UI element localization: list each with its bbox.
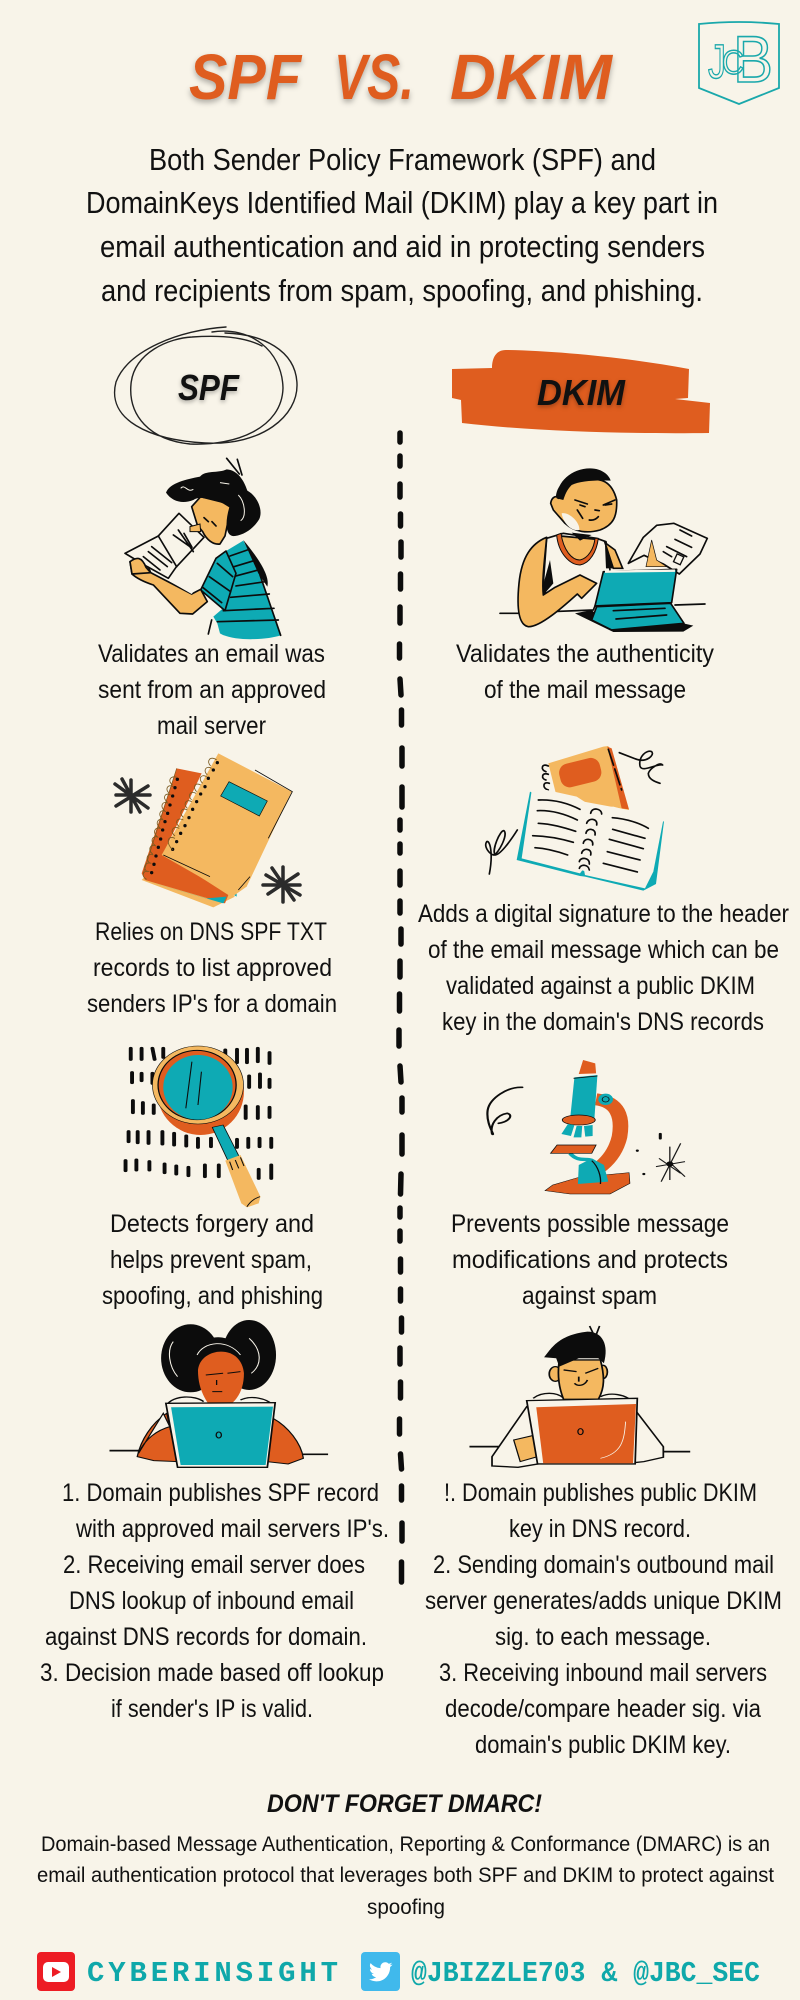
- text: SPF DNS records: records to list approved: [93, 954, 332, 982]
- text: DKIM prevents modification: Prevents possible message: [451, 1210, 729, 1238]
- title: SPF: [189, 41, 303, 113]
- DMARC paragraph: spoofing: [367, 1895, 445, 1919]
- DKIM heading on orange brush stroke: [452, 350, 710, 433]
- text: DKIM digital signature: key in the domain's DNS records: [442, 1008, 764, 1036]
- intro paragraph: and recipients from spam, spoofing, and phishing.: [101, 273, 703, 308]
- text: SPF detects forgery: spoofing, and phishing: [102, 1282, 323, 1310]
- SPF heading with hand-drawn circle: [115, 327, 297, 444]
- text: DKIM prevents modification: modifications and protects: [452, 1246, 728, 1274]
- text: DKIM process steps: sig. to each message.: [495, 1623, 711, 1651]
- text: SPF validates: mail server: [157, 712, 266, 740]
- text: SPF process steps: with approved mail servers IP's.: [75, 1515, 389, 1543]
- text: SPF DNS records: [87, 918, 337, 1018]
- intro paragraph: email authentication and aid in protecting senders: [100, 229, 705, 264]
- text: DKIM process steps: decode/compare header sig. via: [445, 1695, 761, 1723]
- text: SPF process steps: 1. Domain publishes SPF record: [62, 1479, 379, 1507]
- text: SPF validates: Validates an email was: [98, 640, 325, 668]
- text: SPF detects forgery: Detects forgery and: [110, 1210, 314, 1238]
- text: SPF validates: sent from an approved: [98, 676, 326, 704]
- DKIM heading on orange brush stroke: DKIM: [537, 372, 626, 413]
- text: DKIM process steps: [425, 1479, 782, 1759]
- DMARC paragraph: [37, 1832, 774, 1919]
- text: SPF DNS records: senders IP's for a domain: [87, 990, 337, 1018]
- intro paragraph: [86, 142, 718, 308]
- illustration: man at orange laptop: [469, 1326, 690, 1467]
- intro paragraph: DomainKeys Identified Mail (DKIM) play a key part in: [86, 185, 718, 220]
- text: SPF process steps: if sender's IP is valid.: [111, 1695, 313, 1723]
- dashed column divider: [399, 433, 402, 1582]
- text: DKIM process steps: key in DNS record.: [509, 1515, 691, 1543]
- illustration: spiral notebooks: [142, 753, 292, 907]
- text: DKIM prevents modification: [451, 1210, 729, 1310]
- text: DKIM validates: [456, 640, 714, 704]
- footer: Twitter handles: @JBIZZLE703 & @JBC_SEC: [411, 1957, 760, 1990]
- illustration: person reading a book: [125, 458, 281, 639]
- text: DKIM process steps: !. Domain publishes public DKIM: [444, 1479, 757, 1507]
- text: DKIM validates: of the mail message: [484, 676, 686, 704]
- text: SPF DNS records: Relies on DNS SPF TXT: [95, 918, 327, 946]
- title: VS.: [334, 41, 414, 113]
- text: SPF process steps: DNS lookup of inbound email: [69, 1587, 354, 1615]
- icon: asterisk star left: [115, 779, 150, 812]
- text: SPF process steps: [40, 1479, 389, 1723]
- text: SPF validates: [98, 640, 326, 740]
- icon: JBC shield logo: C: [722, 44, 744, 82]
- icon: JBC shield logo: J: [708, 36, 726, 89]
- illustration: man using a tablet: [500, 468, 707, 632]
- text: DKIM validates: Validates the authenticity: [456, 640, 714, 668]
- icon: JBC shield logo: [699, 22, 779, 104]
- icon: asterisk star right: [263, 867, 300, 902]
- text: DKIM process steps: domain's public DKIM key.: [475, 1731, 731, 1759]
- illustration: open notebook: [486, 746, 664, 891]
- text: SPF process steps: 3. Decision made based off lookup: [40, 1659, 384, 1687]
- title: [189, 41, 614, 113]
- illustration: microscope: [487, 1060, 685, 1194]
- icon: Twitter: [361, 1952, 400, 1991]
- SPF heading with hand-drawn circle: SPF: [178, 367, 240, 408]
- icon: JBC shield logo: B: [733, 22, 773, 96]
- intro paragraph: Both Sender Policy Framework (SPF) and: [149, 142, 656, 177]
- icon: YouTube: [37, 1952, 75, 1991]
- illustration: magnifying glass over text marks: [126, 1046, 271, 1207]
- DMARC paragraph: email authentication protocol that leverages both SPF and DKIM to protect against: [37, 1863, 774, 1887]
- text: DKIM digital signature: validated against a public DKIM: [446, 972, 755, 1000]
- text: SPF detects forgery: helps prevent spam,: [110, 1246, 312, 1274]
- DMARC heading: DON'T FORGET DMARC!: [267, 1790, 542, 1818]
- text: DKIM prevents modification: against spam: [522, 1282, 657, 1310]
- text: SPF detects forgery: [102, 1210, 323, 1310]
- text: SPF process steps: 2. Receiving email server does: [63, 1551, 365, 1579]
- text: DKIM digital signature: [418, 900, 789, 1036]
- illustration: woman at teal laptop: [109, 1320, 328, 1467]
- footer: YouTube channel name: CYBERINSIGHT: [87, 1957, 338, 1990]
- title: DKIM: [450, 41, 614, 113]
- text: SPF process steps: against DNS records for domain.: [45, 1623, 367, 1651]
